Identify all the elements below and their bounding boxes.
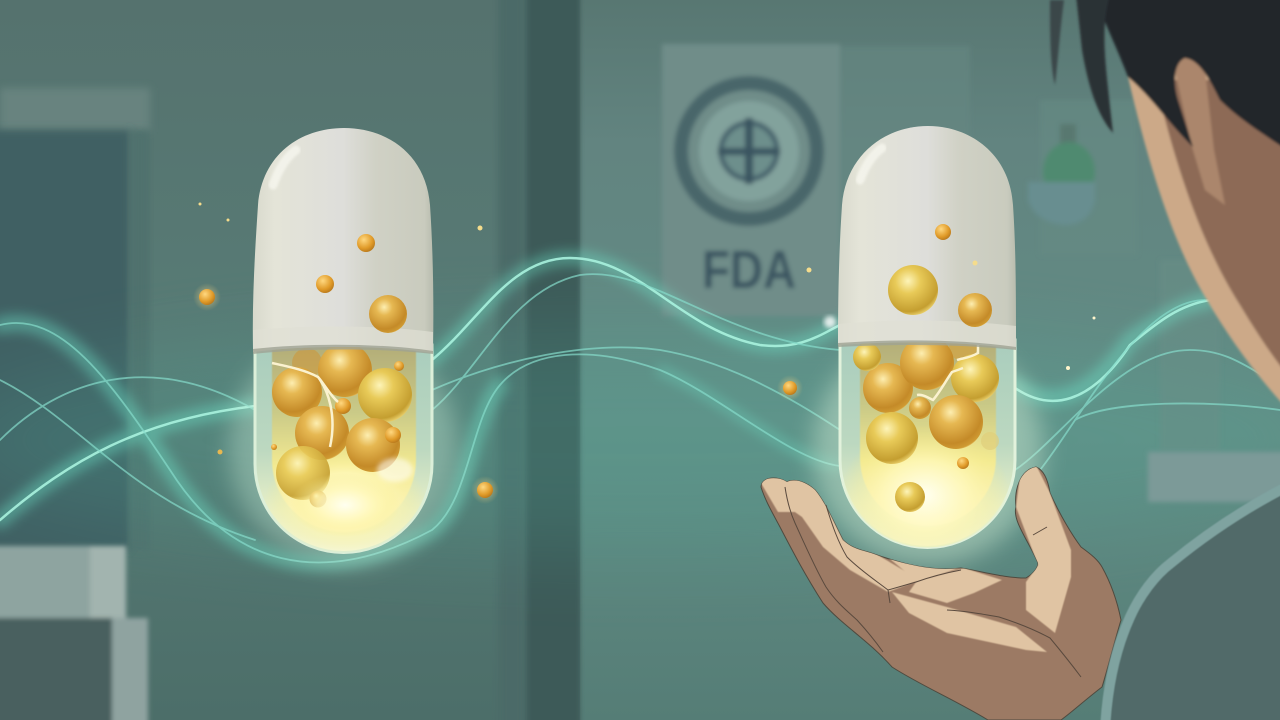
gold spheres left bbox=[271, 343, 413, 537]
person head bbox=[1050, 0, 1280, 412]
box bottom left bbox=[0, 546, 148, 720]
poster: FDA bbox=[662, 44, 970, 316]
capsule transparent lower half bbox=[840, 340, 1015, 565]
floating particles bbox=[193, 202, 1096, 504]
right capsule bbox=[813, 126, 1043, 565]
poster label: FDA bbox=[702, 240, 796, 300]
white cap left bbox=[253, 128, 433, 354]
spheres on right cap bbox=[888, 224, 992, 327]
hand bbox=[758, 465, 1121, 720]
capsule transparent lower half bbox=[255, 345, 432, 555]
right wall details bbox=[1148, 260, 1280, 502]
left capsule bbox=[229, 128, 459, 565]
spheres on left cap bbox=[316, 234, 407, 333]
lit finger and palm areas bbox=[758, 465, 1071, 652]
energy waves bbox=[0, 258, 1280, 562]
poster: bottle bbox=[1028, 100, 1137, 255]
gold spheres right bbox=[853, 333, 999, 512]
white cap right bbox=[838, 126, 1016, 350]
person shoulder bbox=[1105, 485, 1280, 720]
